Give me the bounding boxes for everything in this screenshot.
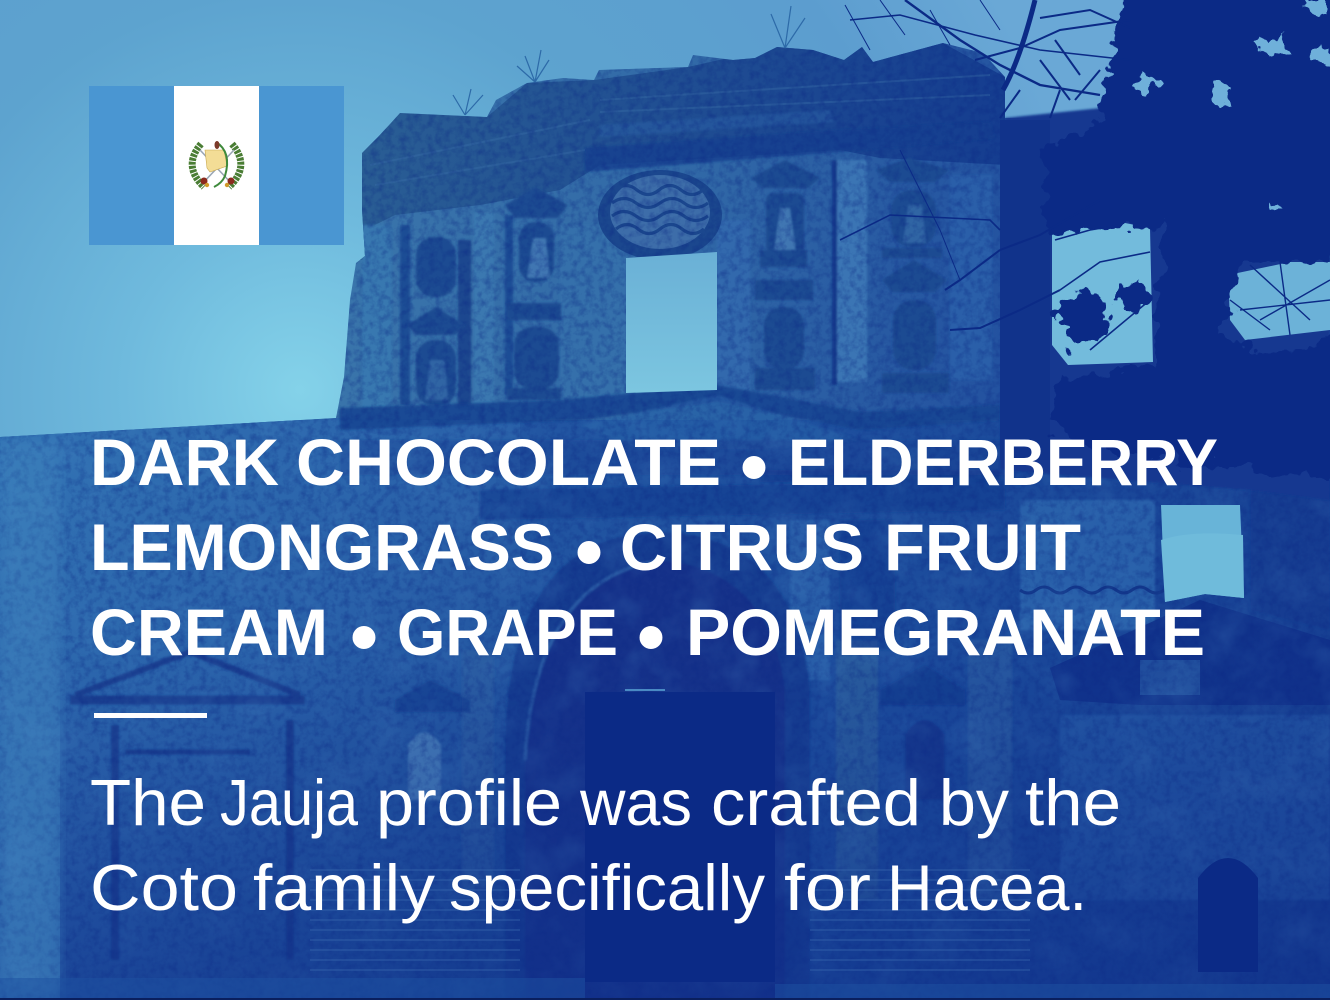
flag: right blue stripe <box>259 86 344 245</box>
description line 2: Coto <box>90 851 238 924</box>
door sliver highlight <box>625 689 665 691</box>
flavor line 1: ELDERBERRY <box>788 425 1218 499</box>
flavor line 2: CITRUS <box>620 510 864 584</box>
niche beside portal <box>408 732 441 800</box>
tree foliage upper right <box>1040 0 1330 480</box>
flag: white centre stripe <box>174 86 259 245</box>
description line 1: was <box>579 766 692 839</box>
flavor line 3: • <box>350 592 378 681</box>
sky gaps in foliage <box>1135 0 1330 214</box>
flavor line 3: GRAPE <box>397 595 618 669</box>
description line 1: crafted <box>711 766 921 839</box>
flavor line 3: POMEGRANATE <box>686 595 1205 669</box>
flavor line 2: FRUIT <box>884 510 1081 584</box>
flavor line 1 <box>90 422 1218 511</box>
description line 2: specifically <box>449 851 765 924</box>
description line 1: the <box>1025 766 1121 839</box>
portal arch <box>505 532 810 1000</box>
right sky patch behind tree <box>1228 262 1330 340</box>
brickwork lower panels <box>310 870 1030 970</box>
rose window arch <box>598 170 722 260</box>
description line 1 <box>90 766 1121 839</box>
description line 2 <box>90 851 1087 924</box>
description line 1: The <box>90 766 206 839</box>
flavor line 2: LEMONGRASS <box>90 510 554 584</box>
dark right edge beside window <box>1250 480 1330 630</box>
flag: coat of arms emblem <box>192 141 241 187</box>
bottom shading <box>0 978 585 998</box>
lower left pediment <box>70 652 305 960</box>
description line 2: for <box>784 851 871 924</box>
small dark door, lower right <box>1198 858 1258 972</box>
flag of Guatemala <box>89 86 344 245</box>
flavor line 1: • <box>740 422 768 511</box>
flavor line 2 <box>90 507 1081 596</box>
roof mass <box>340 43 1005 260</box>
statues <box>425 205 926 400</box>
flavor line 2: • <box>575 507 603 596</box>
description line 2: family <box>253 851 436 924</box>
tree branches <box>840 0 1330 350</box>
lower dimming <box>60 725 1330 998</box>
lower columns <box>395 520 1012 900</box>
description line 1: profile <box>376 766 562 839</box>
description line 1: Jauja <box>220 766 359 839</box>
description line 1: by <box>939 766 1010 839</box>
flavor line 3: • <box>637 592 665 681</box>
right window <box>1161 505 1244 602</box>
leaf cluster in opening <box>1061 279 1146 346</box>
divider rule <box>94 713 207 718</box>
flavor notes heading <box>90 422 1218 681</box>
rooftop weeds <box>453 6 805 115</box>
central dark doorway <box>585 692 775 982</box>
description line 2: Hacea. <box>887 851 1087 924</box>
flavor line 1: CHOCOLATE <box>296 425 721 499</box>
right opening showing sky <box>1052 221 1153 365</box>
flavor line 3: CREAM <box>90 595 328 669</box>
left glow on wall <box>0 440 60 1000</box>
main cornice with gable over portal <box>340 385 1005 520</box>
dark lower-right cornice <box>1050 600 1330 705</box>
description text <box>90 766 1121 924</box>
flavor line 1: DARK <box>90 425 279 499</box>
niches and pediments <box>407 158 949 406</box>
pale wall right of centre <box>1020 500 1155 630</box>
flag: left blue stripe <box>89 86 174 245</box>
flavor line 3 <box>90 592 1205 681</box>
right upper dark wing <box>1000 100 1330 500</box>
columns and pale piers <box>362 160 992 412</box>
open window in facade <box>626 252 717 393</box>
